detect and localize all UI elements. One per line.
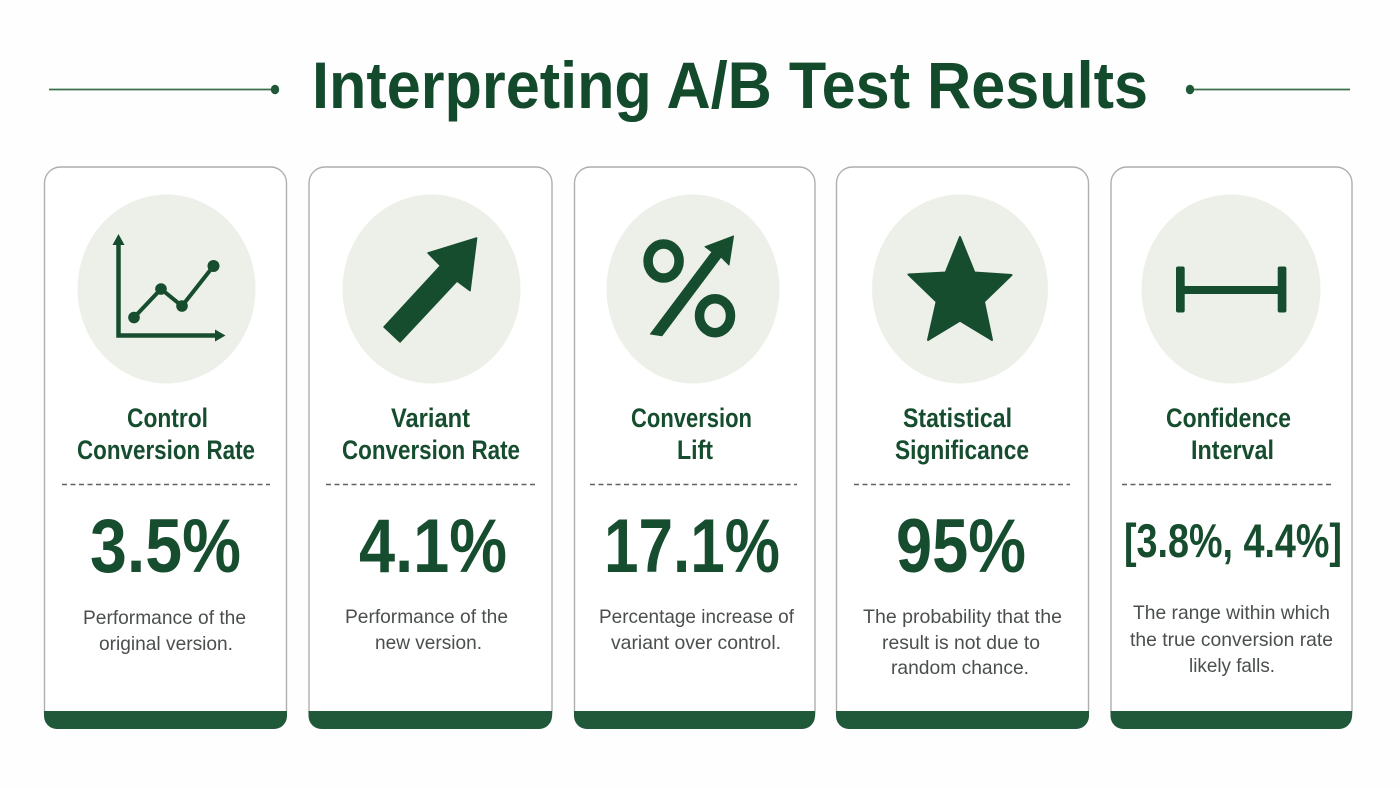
icon: percent with rising arrow [648,236,734,336]
value: 3.5% [90,504,241,589]
icon circle [872,194,1048,384]
panel: conversion lift [574,167,815,729]
title ornament: left line with dot [49,85,279,94]
description: original version. [99,633,233,655]
icon circle [1142,194,1320,384]
heading: Conversion [631,403,752,433]
title ornament: right line with dot [1186,85,1350,94]
value: 95% [896,504,1026,589]
icon circle [342,194,520,384]
heading: Confidence [1166,403,1291,433]
heading: Interval [1191,435,1274,465]
description [863,606,1062,679]
heading: Significance [895,435,1029,465]
icon: star [908,237,1012,340]
panel: statistical significance [836,167,1089,729]
description: likely falls. [1189,655,1275,677]
description [599,606,795,654]
heading: Statistical [903,403,1012,433]
description: Percentage increase of [599,606,795,628]
description: The probability that the [863,606,1062,628]
icon circle [78,194,256,384]
heading: Lift [677,435,713,465]
heading [342,403,520,465]
value: [3.8%, 4.4%] [1124,514,1342,567]
value: 17.1% [604,504,780,589]
card footer bar [574,711,815,729]
description: result is not due to [882,632,1040,654]
card footer bar [44,711,287,729]
heading: Variant [391,403,470,433]
description: the true conversion rate [1130,629,1333,651]
description: The range within which [1133,602,1330,624]
heading: Conversion Rate [342,435,520,465]
icon: line chart [112,234,226,342]
description: new version. [375,632,482,654]
panel: control conversion rate [44,167,287,729]
description: variant over control. [611,632,781,654]
panel: variant conversion rate [308,167,552,729]
heading: Control [127,403,208,433]
description: Performance of the [83,607,246,629]
description: random chance. [891,657,1029,679]
heading [631,403,752,465]
heading [77,403,255,465]
description [1130,602,1333,677]
description [83,607,246,655]
panel: confidence interval [1110,167,1352,729]
icon circle [606,194,780,384]
card footer bar [1110,711,1352,729]
description [345,606,508,654]
heading [1166,403,1291,465]
description: Performance of the [345,606,508,628]
heading [895,403,1029,465]
icon: diagonal arrow [384,238,477,342]
title: Interpreting A/B Test Results [312,48,1148,122]
card footer bar [836,711,1089,729]
card footer bar [308,711,552,729]
value: 4.1% [359,504,507,589]
heading: Conversion Rate [77,435,255,465]
icon: interval bracket [1176,266,1286,312]
